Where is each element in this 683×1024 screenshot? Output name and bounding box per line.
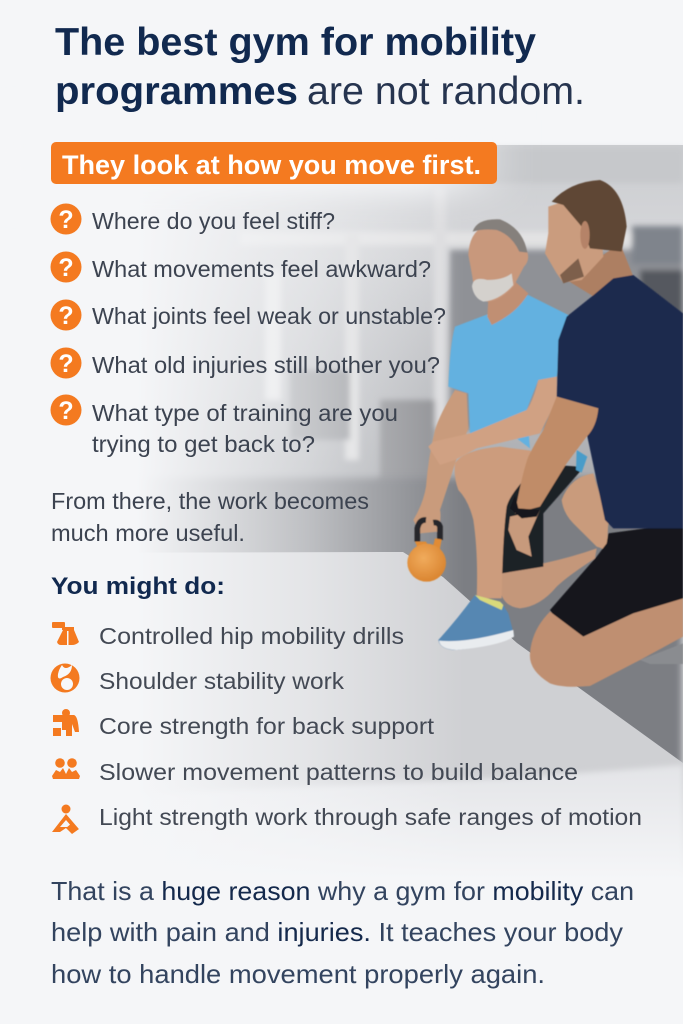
client shoe <box>438 595 514 650</box>
client shirt <box>448 295 568 448</box>
subheading: You might do: <box>51 573 225 600</box>
question 1: Where do you feel stiff? <box>92 208 335 234</box>
client beard <box>472 273 513 302</box>
question 4: What old injuries still bother you? <box>92 352 440 378</box>
question 5: ? <box>58 397 74 425</box>
trainer face <box>545 202 603 283</box>
transition text <box>51 488 369 546</box>
orange banner: They look at how you move first. <box>62 150 481 180</box>
activity 2: shoulder: Shoulder stability work <box>99 668 345 694</box>
orange banner <box>51 142 497 184</box>
question 2: What movements feel awkward? <box>92 256 431 282</box>
activity 5: light strength: Light strength work through safe ranges of motion <box>99 804 642 830</box>
photo: gym background <box>0 145 683 490</box>
activity 4: balance: Slower movement patterns to build balance <box>99 759 578 785</box>
closing paragraph: help with pain and injuries. It teaches your body <box>51 917 623 947</box>
trainer foot <box>640 643 683 664</box>
trainer hand <box>508 510 540 557</box>
activity 1: hip drills: Controlled hip mobility drills <box>99 623 404 649</box>
trainer shorts <box>550 523 683 637</box>
kettlebell <box>407 520 446 582</box>
trainer front leg <box>530 598 683 687</box>
closing paragraph: how to handle movement properly again. <box>51 959 545 989</box>
trainer rear knee <box>562 473 608 550</box>
question 5 <box>50 394 398 457</box>
question list <box>50 204 446 457</box>
transition text: From there, the work becomes <box>51 488 369 514</box>
trainer arm <box>515 397 598 513</box>
client shirt hem <box>576 450 587 473</box>
question 5: trying to get back to? <box>92 431 315 457</box>
title: are not random. <box>307 70 585 113</box>
activity 3: core: Core strength for back support <box>99 713 435 739</box>
client front thigh and shin <box>455 447 533 598</box>
question 1: ? <box>58 206 74 234</box>
question 2: ? <box>58 254 74 282</box>
trainer neck <box>567 243 633 298</box>
trainer shirt <box>557 275 683 528</box>
client hair <box>473 219 527 253</box>
trainer ear <box>580 221 590 249</box>
activity 2: shoulder <box>50 664 345 694</box>
title: The best gym for mobility <box>55 21 536 64</box>
activity list <box>50 622 642 834</box>
closing paragraph: That is a huge reason why a gym for mobility can <box>51 876 634 906</box>
trainer hair <box>552 180 627 252</box>
client hanging arm <box>413 390 468 533</box>
title: programmes <box>55 70 298 113</box>
photo: client and trainer <box>407 180 683 687</box>
photo: gym floor <box>0 478 683 1024</box>
client rear leg <box>500 548 597 608</box>
title <box>55 21 585 113</box>
closing paragraph <box>51 876 634 989</box>
question 3: What joints feel weak or unstable? <box>92 303 446 329</box>
trainer stubble <box>560 258 584 283</box>
client shorts <box>502 463 580 573</box>
question 3: ? <box>58 302 74 330</box>
transition text: much more useful. <box>51 520 245 546</box>
client head <box>468 227 528 302</box>
client forearm and hand <box>428 377 557 465</box>
trainer watch <box>510 495 540 518</box>
question 5: What type of training are you <box>92 400 398 426</box>
question 4: ? <box>58 350 74 378</box>
client neck <box>487 280 528 325</box>
